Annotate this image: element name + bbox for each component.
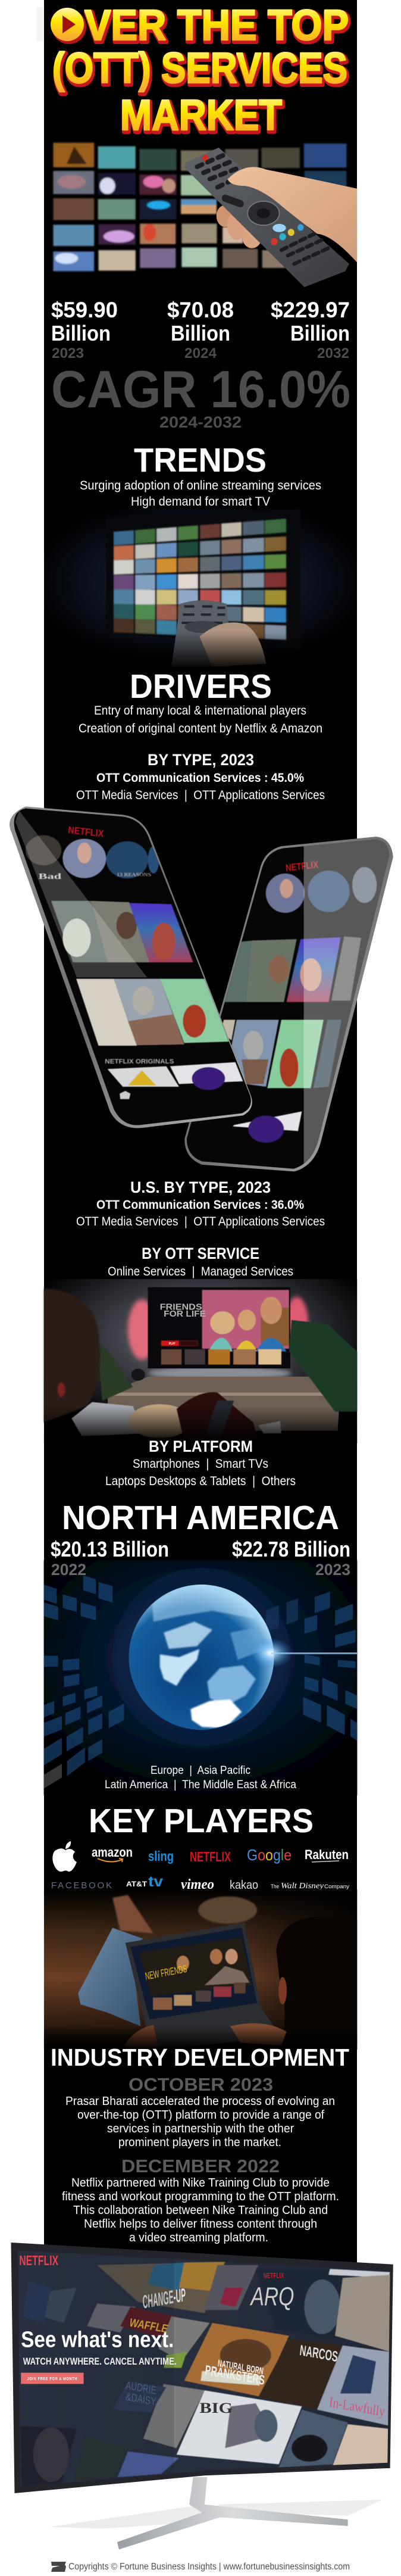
by OTT service: BY OTT SERVICE — [142, 1245, 259, 1262]
monitor frame — [11, 2243, 393, 2493]
monitor screen — [18, 2251, 390, 2487]
laptop title: NEW FRIENDS — [145, 1963, 188, 1982]
market value 2024: Billion — [171, 321, 230, 345]
by platform: Laptops Desktops & Tablets | Others — [105, 1474, 296, 1488]
background props — [112, 1895, 257, 1933]
TV glow — [44, 509, 357, 670]
poster titles — [125, 2272, 386, 2419]
CAGR period: 2024-2032 — [159, 413, 242, 431]
jeans leg — [78, 1928, 143, 2026]
north america value 2023: 2023 — [315, 1561, 350, 1579]
poster titles: In-Lawfully — [328, 2394, 386, 2419]
viewer head — [276, 1917, 357, 2045]
globe flare — [248, 1638, 293, 1669]
development: December 2022: a video streaming platform. — [129, 2231, 268, 2244]
hero image: wall of screens with TV remote in hand — [53, 143, 357, 287]
logo: AT&T tv: AT&T — [126, 1880, 148, 1888]
poster titles: CHANGE-UP — [142, 2284, 187, 2312]
screen subhead: WATCH ANYWHERE. CANCEL ANYTIME. — [23, 2357, 177, 2368]
left phone content: NETFLIX — [68, 825, 104, 840]
left phone — [10, 806, 252, 1128]
key player logos — [51, 1841, 350, 1892]
TV show title: FOR LIFE — [164, 1309, 206, 1319]
fade out — [44, 631, 357, 670]
remote in hand — [171, 600, 266, 666]
thumbnail grid — [114, 519, 286, 640]
left phone content: 13 REASONS — [117, 872, 151, 878]
north america value 2022: $20.13 Billion — [51, 1537, 169, 1561]
faint dither beside title — [36, 7, 43, 42]
market value 2023: 2023 — [52, 345, 84, 361]
continents — [151, 1585, 266, 1728]
Fortune Business Insights logo — [51, 2562, 66, 2572]
left phone content: NETFLIX ORIGINALS — [105, 1058, 174, 1065]
stand — [117, 2477, 348, 2549]
stand shadow — [49, 2500, 383, 2528]
image: monitor showing Netflix — [11, 2243, 393, 2549]
right phone content — [220, 860, 377, 1143]
U.S. by type: OTT Media Services | OTT Applications Services — [76, 1215, 325, 1228]
other regions — [105, 1764, 296, 1791]
market value 2024 — [167, 298, 234, 361]
TV show title: FRIENDS — [160, 1302, 202, 1312]
footer copyright — [51, 2562, 350, 2572]
other regions: Europe | Asia Pacific — [151, 1764, 250, 1777]
key players heading: KEY PLAYERS — [89, 1802, 314, 1840]
poster titles: ARQ — [250, 2283, 294, 2311]
by OTT service: Online Services | Managed Services — [108, 1265, 293, 1278]
poster titles: &DAISY — [125, 2390, 157, 2408]
poster titles: PRANKSTERS — [204, 2363, 265, 2388]
brown room background — [44, 1889, 357, 2050]
logo: AT&T tv — [126, 1873, 163, 1890]
market value 2032: Billion — [290, 321, 350, 345]
Netflix logo on screen: NETFLIX — [19, 2253, 58, 2268]
north america value 2022: 2022 — [51, 1561, 86, 1579]
dark blue backdrop — [44, 1560, 357, 1795]
fade — [44, 2026, 357, 2050]
logo: AT&T tv: tv — [148, 1873, 163, 1890]
TV — [148, 1287, 290, 1368]
market value 2024: 2024 — [184, 345, 217, 361]
market value 2032: 2032 — [317, 345, 349, 361]
trends text: Surging adoption of online streaming services — [80, 479, 321, 492]
wall — [44, 1279, 357, 1443]
logo: Netflix: NETFLIX — [190, 1849, 231, 1864]
development: October 2023: prominent players in the market. — [118, 2136, 281, 2149]
logo: Rakuten: Rakuten — [305, 1847, 349, 1862]
fade — [44, 1406, 357, 1443]
hand palm — [228, 167, 357, 263]
other regions: Latin America | The Middle East & Africa — [105, 1779, 296, 1791]
screen button: JOIN FREE FOR A MONTH — [27, 2377, 77, 2381]
image: person watching laptop — [44, 1889, 357, 2050]
logo: Walt Disney Company: Walt Disney — [281, 1882, 324, 1891]
development: October 2023: Prasar Bharati accelerated the process of evolving an — [65, 2095, 335, 2108]
screen wall — [53, 143, 347, 271]
market value 2023 — [51, 298, 118, 361]
poster titles: NARCOS — [299, 2342, 339, 2365]
north america value 2022 — [51, 1537, 169, 1579]
TV colour glow — [128, 1297, 308, 1380]
logo: amazon: amazon — [92, 1845, 133, 1860]
image: globe with video screens — [44, 1560, 357, 1795]
title line 1: VER THE TOP — [84, 2, 349, 49]
logo: Google: Google — [247, 1846, 292, 1864]
title — [51, 2, 350, 141]
development: October 2023: services in partnership with the other — [107, 2122, 294, 2135]
north america heading: NORTH AMERICA — [62, 1499, 339, 1537]
title icon: play button — [51, 8, 86, 44]
market value 2032: $229.97 — [271, 298, 350, 322]
laptop — [126, 1922, 281, 2050]
drivers text: Entry of many local & international players — [94, 704, 306, 718]
development: December 2022: This collaboration between Nike Training Club and — [73, 2204, 328, 2217]
market value 2023: Billion — [51, 321, 111, 345]
trends heading: TRENDS — [134, 441, 267, 479]
right phone — [184, 837, 396, 1174]
poster titles: NATURAL BORN — [217, 2359, 264, 2377]
by type segment: BY TYPE, 2023 — [148, 751, 254, 769]
viewer head — [44, 1289, 100, 1423]
TV frame — [106, 509, 300, 649]
TV show title — [160, 1302, 206, 1346]
poster tiles — [20, 2262, 391, 2487]
floating video tiles — [44, 1575, 357, 1788]
CAGR figure: CAGR 16.0% — [51, 360, 350, 419]
drivers text — [79, 704, 322, 735]
drivers heading: DRIVERS — [130, 668, 272, 706]
by platform — [105, 1437, 296, 1488]
north america value 2023 — [232, 1537, 350, 1579]
viewer with popcorn — [71, 1392, 281, 1442]
drivers text: Creation of original content by Netflix & Amazon — [79, 722, 322, 735]
image: two phones showing Netflix — [10, 806, 396, 1174]
remote control — [184, 148, 349, 287]
north america value 2023: $22.78 Billion — [232, 1537, 350, 1561]
left phone content — [26, 825, 243, 1099]
U.S. by type — [76, 1178, 325, 1228]
right phone content: NETFLIX — [285, 860, 319, 874]
development: December 2022: fitness and workout programming to the OTT platform. — [62, 2190, 339, 2203]
development: December 2022: Netflix partnered with Nike Training Club to provide — [71, 2176, 330, 2190]
logo: Vimeo: vimeo — [181, 1877, 214, 1892]
title line 3: MARKET — [121, 93, 283, 141]
by platform: BY PLATFORM — [149, 1437, 253, 1455]
by type segment: OTT Communication Services : 45.0% — [96, 771, 304, 785]
title line 2: (OTT) SERVICES — [54, 46, 349, 94]
industry development heading: INDUSTRY DEVELOPMENT — [51, 2044, 349, 2071]
logo: Walt Disney Company: The — [271, 1883, 279, 1889]
TV photo — [161, 1290, 289, 1365]
TV show title: PLAY — [169, 1342, 176, 1346]
title line 2: (OTT) SERVICES — [52, 45, 347, 92]
screen button — [21, 2373, 84, 2384]
globe — [112, 1568, 357, 1747]
by type segment: OTT Media Services | OTT Applications Services — [76, 788, 325, 802]
development: October 2023 — [65, 2074, 335, 2149]
logo: Facebook: FACEBOOK — [51, 1880, 112, 1891]
poster titles: BIG — [199, 2400, 233, 2416]
logo: Apple — [52, 1841, 77, 1872]
development: October 2023: over-the-top (OTT) platform to provide a range of — [77, 2109, 324, 2122]
title line 1: VER THE TOP — [86, 4, 350, 51]
logo: Walt Disney Company: Company — [324, 1883, 350, 1889]
logo: Kakao: kakao — [230, 1879, 258, 1892]
plants — [97, 1320, 357, 1412]
development: October 2023: OCTOBER 2023 — [129, 2074, 273, 2095]
poster titles: WAFFLE — [129, 2316, 169, 2335]
development: December 2022: Netflix helps to deliver fitness content through — [84, 2218, 317, 2231]
left phone content: Bad — [38, 872, 62, 881]
title line 3: MARKET — [120, 92, 282, 139]
trends text: High demand for smart TV — [131, 495, 270, 509]
console — [108, 1377, 340, 1431]
market value 2024: $70.08 — [167, 298, 234, 322]
by OTT service — [108, 1245, 293, 1278]
background panel — [44, 0, 357, 2263]
poster titles: NETFLIX — [264, 2272, 284, 2280]
logo: sling: sling — [148, 1848, 174, 1864]
U.S. by type: OTT Communication Services : 36.0% — [96, 1198, 304, 1212]
speaker — [131, 1368, 145, 1381]
screen headline: See what's next. — [21, 2327, 174, 2352]
by type segment — [76, 751, 325, 802]
hand fingers — [217, 205, 262, 248]
logo: Walt Disney Company — [271, 1882, 350, 1891]
market value 2032 — [271, 298, 350, 361]
by platform: Smartphones | Smart TVs — [133, 1457, 268, 1471]
laptop movie photo — [139, 1938, 252, 2010]
image: video wall TV with remote — [44, 509, 357, 670]
market value 2023: $59.90 — [51, 298, 118, 322]
poster titles: AUDRIE — [125, 2379, 157, 2397]
trends text — [80, 479, 321, 509]
development: December 2022 — [62, 2156, 339, 2244]
image: living room watching TV — [44, 1279, 357, 1443]
hands — [123, 2025, 159, 2048]
development: December 2022: DECEMBER 2022 — [121, 2156, 280, 2176]
U.S. by type: U.S. BY TYPE, 2023 — [130, 1178, 271, 1196]
copyright text: Copyrights © Fortune Business Insights | www.fortunebusinessinsights.com — [68, 2562, 350, 2572]
